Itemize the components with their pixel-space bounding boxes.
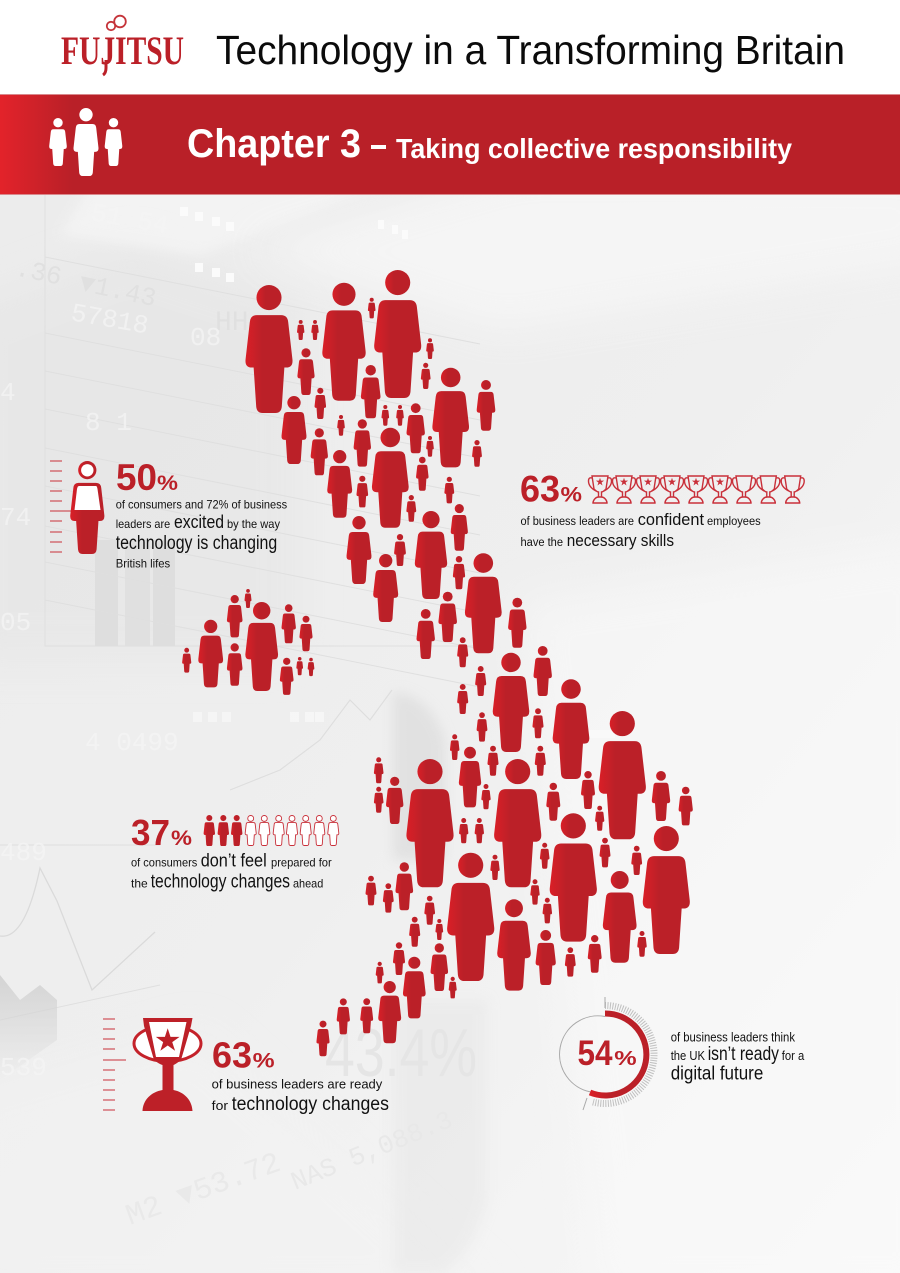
text block	[131, 850, 332, 893]
chapter heading	[187, 122, 792, 166]
50% figure: 50	[116, 457, 157, 498]
text block: digital future	[671, 1063, 763, 1084]
logo: Fujitsu: FUJITSU	[61, 28, 184, 73]
people forming the map of Britain	[245, 270, 693, 1056]
page header background	[0, 0, 900, 95]
text block: by the way	[227, 517, 280, 531]
text block: of consumers and 72% of business	[116, 497, 287, 511]
title: Technology in a Transforming Britain	[216, 27, 845, 73]
background: financial data collage: 4	[0, 378, 16, 408]
stat: 37% consumers unprepared	[131, 812, 339, 893]
text block	[520, 511, 761, 550]
37% figure: %	[171, 827, 192, 850]
text block	[116, 497, 287, 570]
chart: radial gauge	[560, 997, 654, 1110]
37% figure	[131, 812, 192, 853]
background: financial data collage: .36	[12, 253, 64, 293]
text block: technology is changing	[116, 533, 277, 554]
stat: 54% UK not ready	[560, 997, 805, 1110]
background: financial data collage: 05	[0, 608, 31, 638]
text block: employees	[707, 516, 761, 528]
icon: half-filled person with scale ticks	[50, 461, 104, 554]
background: financial data collage: M2 ▼53.72	[122, 1147, 286, 1234]
text block: necessary skills	[567, 532, 674, 550]
text block: technology changes	[232, 1094, 389, 1115]
stat: 50% consumers excited	[50, 457, 287, 570]
background: financial data collage: ▼1.43	[76, 268, 159, 314]
63% figure: %	[253, 1049, 275, 1072]
background: financial data collage: 8 1	[85, 408, 132, 438]
text block: of business leaders are	[520, 516, 634, 528]
background: financial data collage: 489	[0, 838, 47, 868]
text block: prepared for	[271, 856, 332, 870]
text block: British lifes	[116, 556, 170, 570]
text block: of business leaders think	[671, 1030, 795, 1045]
stat: 63% confident employees	[520, 469, 804, 550]
background: financial data collage: NAS 5,088.3	[287, 1105, 457, 1197]
50% figure	[116, 457, 178, 498]
text block: for	[212, 1098, 229, 1113]
text block: ahead	[293, 877, 323, 891]
text block: the	[131, 877, 148, 891]
54% figure: 54	[578, 1034, 613, 1073]
background: financial data collage: 74	[0, 503, 31, 533]
chapter banner	[0, 94, 900, 195]
text block: don’t feel	[201, 850, 267, 871]
chapter heading: Taking collective responsibility	[396, 133, 792, 164]
37% figure: 37	[131, 812, 170, 853]
54% figure: %	[614, 1047, 637, 1070]
text block: the UK	[671, 1048, 705, 1063]
63% figure: %	[560, 484, 582, 507]
text block: of consumers	[131, 856, 197, 870]
63% figure: 63	[520, 469, 560, 510]
text block: have the	[520, 537, 563, 549]
background: financial data collage: 57818	[69, 298, 151, 341]
icon row: nine trophies, six with stars	[588, 476, 804, 503]
chapter heading: Chapter 3	[187, 122, 361, 166]
text block: excited	[174, 512, 224, 532]
text block: leaders are	[116, 517, 170, 531]
icon: trophy with scale ticks	[103, 1018, 201, 1111]
text block: for a	[782, 1048, 805, 1063]
text block: of business leaders are ready	[212, 1076, 383, 1091]
63% figure	[520, 469, 582, 510]
50% figure: %	[157, 472, 178, 495]
background: financial data collage: 43.4%	[325, 1015, 477, 1091]
icon: three people	[49, 108, 122, 176]
background: financial data collage: 08	[190, 323, 221, 353]
text block: confident	[638, 511, 704, 529]
63% figure	[212, 1034, 275, 1075]
54% figure	[578, 1034, 637, 1073]
text block	[212, 1076, 389, 1115]
logo: Fujitsu	[61, 16, 184, 75]
background: financial data collage: HH	[215, 308, 249, 339]
background: financial data collage: 539	[0, 1053, 47, 1083]
background: financial data collage: 51 54	[89, 198, 171, 241]
stat: 63% leaders ready	[103, 1018, 389, 1115]
people cluster: Northern Ireland	[182, 589, 314, 695]
text block: technology changes	[151, 872, 290, 893]
63% figure: 63	[212, 1034, 252, 1075]
text block	[671, 1030, 805, 1084]
text block: isn’t ready	[708, 1044, 779, 1065]
background: financial data collage: 4 0499	[85, 728, 179, 758]
icon row: ten people, three filled	[204, 815, 339, 846]
